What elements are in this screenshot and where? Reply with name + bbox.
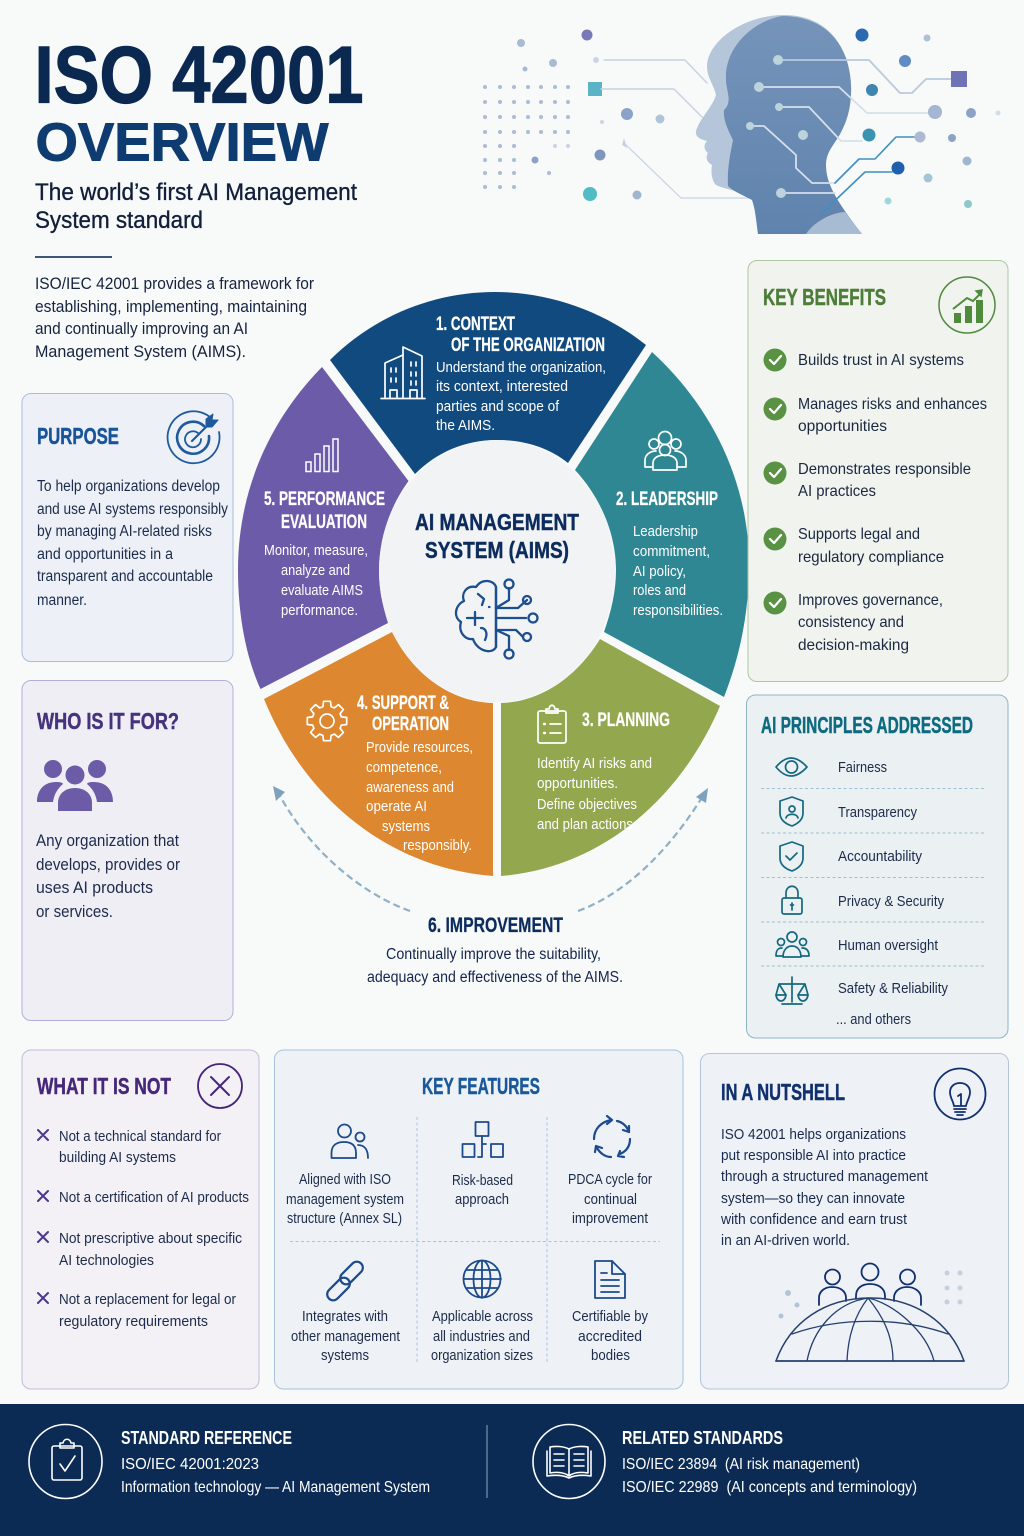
panel: what it is not xyxy=(22,1050,259,1389)
text: segment 4: awareness and xyxy=(366,779,454,796)
panel: purpose xyxy=(22,394,233,662)
text: feature risk-based: approach xyxy=(455,1192,509,1208)
text: related standards: ISO/IEC 23894 (AI risk management) xyxy=(622,1456,860,1473)
text: nutshell description: with confidence and earn trust xyxy=(720,1211,908,1228)
text: audience: Any organization that xyxy=(36,832,179,850)
text: feature risk-based xyxy=(452,1173,513,1208)
icon: people xyxy=(645,432,686,470)
text: segment 4: operate AI xyxy=(366,798,427,815)
text: segment 1: Understand the organization, xyxy=(436,359,606,376)
text: feature integrates: other management xyxy=(291,1329,400,1345)
icon: shield check xyxy=(780,842,803,871)
icon: eye xyxy=(776,758,807,776)
list: not items: building AI systems xyxy=(59,1150,176,1166)
intro text: establishing, implementing, maintaining xyxy=(35,298,307,316)
text: audience: uses AI products xyxy=(36,879,153,897)
icon: target xyxy=(168,411,220,463)
text: nutshell description xyxy=(720,1126,929,1249)
title: ISO 42001 xyxy=(34,30,364,120)
text: segment 5: analyze and xyxy=(281,562,350,579)
text: feature integrates: Integrates with xyxy=(302,1309,388,1325)
panel: AI principles xyxy=(746,695,1008,1038)
text: feature certifiable xyxy=(572,1309,649,1364)
text: segment 5: Monitor, measure, xyxy=(264,542,368,559)
list: benefits: Improves governance, xyxy=(798,592,943,609)
panel: who is it for xyxy=(22,680,233,1020)
list: principles: Privacy & Security xyxy=(838,894,945,910)
center: AI management system: AI MANAGEMENT xyxy=(415,509,580,535)
icon: cycle arrows xyxy=(594,1116,630,1157)
icon: padlock xyxy=(782,886,802,914)
illustration: AI head with circuits xyxy=(483,15,1000,234)
text: nutshell description: put responsible AI into practice xyxy=(721,1147,906,1164)
text: segment 5: EVALUATION xyxy=(281,512,367,533)
text: segment 3: Identify AI risks and xyxy=(537,755,652,772)
text: standard reference: Information technology — AI Management System xyxy=(121,1479,430,1496)
text: segment 3: opportunities. xyxy=(537,775,618,792)
text: segment 1: parties and scope of xyxy=(436,398,560,415)
text: related standards xyxy=(622,1428,917,1496)
text: improvement: adequacy and effectiveness of the AIMS. xyxy=(367,969,623,986)
text: feature PDCA xyxy=(568,1172,652,1227)
list: not items: regulatory requirements xyxy=(59,1314,208,1330)
icon: chain link xyxy=(325,1259,365,1303)
text: purpose description: transparent and accountable xyxy=(37,568,213,585)
text: segment 4: competence, xyxy=(366,759,442,776)
heading: in a nutshell: IN A NUTSHELL xyxy=(721,1079,845,1105)
panel: key benefits xyxy=(748,260,1008,682)
heading: who is it for: WHO IS IT FOR? xyxy=(37,708,179,734)
subtitle: The world’s first AI Management xyxy=(35,179,357,206)
text: purpose description: To help organizations develop xyxy=(37,478,220,495)
text: feature certifiable: Certifiable by xyxy=(572,1309,649,1325)
footer band xyxy=(0,1404,1024,1536)
title xyxy=(34,30,364,172)
segment 2: leadership xyxy=(575,352,749,697)
icon: bar chart xyxy=(306,439,338,472)
text: purpose description xyxy=(37,478,228,609)
text: segment 3: Define objectives xyxy=(537,796,637,813)
text: related standards: RELATED STANDARDS xyxy=(622,1428,783,1448)
text: audience: or services. xyxy=(36,903,113,921)
list: benefits: opportunities xyxy=(798,418,887,435)
icon: lightbulb xyxy=(934,1068,986,1120)
text: nutshell description: ISO 42001 helps organizations xyxy=(721,1126,906,1143)
text: segment 4: responsibly. xyxy=(403,837,472,854)
icon: brain circuit xyxy=(456,580,538,658)
segment 3: planning xyxy=(501,639,720,876)
list: benefits: Supports legal and xyxy=(798,526,920,543)
center: AI management system xyxy=(379,440,615,702)
list: benefits: decision-making xyxy=(798,637,909,654)
text: segment 5: evaluate AIMS xyxy=(281,582,363,599)
list: benefits: regulatory compliance xyxy=(798,549,944,566)
list: not items: Not a certification of AI products xyxy=(59,1190,249,1206)
text: feature applicable: Applicable across xyxy=(432,1309,533,1325)
text: segment 5 xyxy=(264,489,385,619)
text: segment 4: systems xyxy=(382,818,430,835)
text: segment 2 xyxy=(616,489,723,619)
list: principles xyxy=(836,760,949,1028)
text: feature aligned xyxy=(286,1172,404,1227)
text: segment 1: 1. CONTEXT xyxy=(436,314,515,335)
icon: hierarchy xyxy=(462,1122,503,1157)
list: principles: ... and others xyxy=(836,1012,911,1028)
text: feature certifiable: accredited xyxy=(578,1329,642,1345)
text: segment 1: the AIMS. xyxy=(436,417,495,434)
text: feature applicable: all industries and xyxy=(433,1329,530,1345)
text: segment 4: Provide resources, xyxy=(366,739,473,756)
text: standard reference: STANDARD REFERENCE xyxy=(121,1428,292,1448)
text: nutshell description: in an AI-driven world. xyxy=(721,1232,850,1249)
text: segment 2: commitment, xyxy=(633,543,710,560)
text: segment 3: 3. PLANNING xyxy=(582,710,670,731)
heading: key features: KEY FEATURES xyxy=(422,1073,540,1099)
text: segment 1: its context, interested xyxy=(436,378,568,395)
text: standard reference: ISO/IEC 42001:2023 xyxy=(121,1456,259,1473)
list: benefits: AI practices xyxy=(798,483,876,500)
list: not items: AI technologies xyxy=(59,1253,154,1269)
list: not items xyxy=(38,1129,249,1330)
text: feature PDCA: improvement xyxy=(572,1211,648,1227)
text: segment 1: OF THE ORGANIZATION xyxy=(451,335,605,356)
text: feature aligned: Aligned with ISO xyxy=(299,1172,391,1188)
text: nutshell description: through a structured management xyxy=(721,1168,929,1185)
text: standard reference xyxy=(121,1428,430,1496)
text: segment 1 xyxy=(436,314,606,434)
panel: key features xyxy=(274,1050,683,1389)
intro text: Management System (AIMS). xyxy=(35,343,246,361)
list: benefits: consistency and xyxy=(798,614,904,631)
icon: gear xyxy=(307,701,347,741)
icon: two people xyxy=(332,1124,368,1158)
title: OVERVIEW xyxy=(36,114,329,172)
icon: people xyxy=(37,760,113,811)
text: feature aligned: management system xyxy=(286,1192,404,1208)
intro text: and continually improving an AI xyxy=(35,320,248,338)
heading: key benefits: KEY BENEFITS xyxy=(763,284,886,310)
text: feature PDCA: continual xyxy=(584,1192,637,1208)
chart: AIMS wheel xyxy=(238,292,749,876)
list: principles: Transparency xyxy=(838,805,918,821)
text: segment 5: performance. xyxy=(281,602,358,619)
subtitle xyxy=(35,179,357,234)
list: principles: Fairness xyxy=(838,760,887,776)
arrow: improvement right xyxy=(578,788,708,911)
icon: growth chart xyxy=(939,277,995,333)
text: segment 4: OPERATION xyxy=(372,714,449,735)
intro text: ISO/IEC 42001 provides a framework for xyxy=(35,275,314,293)
text: purpose description: by managing AI-related risks xyxy=(37,523,212,540)
text: nutshell description: system—so they can innovate xyxy=(721,1190,905,1207)
icon: clipboard xyxy=(538,705,566,743)
text: purpose description: and use AI systems responsibly xyxy=(37,501,228,518)
list: principles: Accountability xyxy=(838,849,923,865)
intro text xyxy=(35,275,314,361)
list: not items: Not a replacement for legal or xyxy=(59,1292,236,1308)
icon: open book xyxy=(533,1424,605,1498)
list: benefits xyxy=(764,348,987,654)
text: feature certifiable: bodies xyxy=(591,1348,630,1364)
heading: purpose: PURPOSE xyxy=(37,423,119,449)
text: segment 4: 4. SUPPORT & xyxy=(357,693,449,714)
text: feature PDCA: PDCA cycle for xyxy=(568,1172,652,1188)
text: improvement: Continually improve the suitability, xyxy=(386,946,601,963)
text: purpose description: manner. xyxy=(37,592,87,609)
text: segment 4 xyxy=(357,693,473,854)
text: feature integrates: systems xyxy=(321,1348,369,1364)
text: segment 5: 5. PERFORMANCE xyxy=(264,489,385,510)
heading: what it is not: WHAT IT IS NOT xyxy=(37,1073,171,1099)
text: segment 3: and plan actions xyxy=(537,816,633,833)
text: improvement xyxy=(367,914,623,986)
panel: in a nutshell xyxy=(700,1054,1008,1389)
icon: clipboard check xyxy=(29,1424,102,1498)
list: principles: Safety & Reliability xyxy=(838,981,949,997)
list: benefits: Builds trust in AI systems xyxy=(798,352,964,369)
text: audience xyxy=(36,832,180,921)
icon: document xyxy=(595,1261,625,1298)
list: principles: Human oversight xyxy=(838,938,938,954)
segment 5: performance evaluation xyxy=(238,367,408,689)
list: benefits: Manages risks and enhances xyxy=(798,396,987,413)
text: feature applicable xyxy=(431,1309,533,1364)
icon: shield person xyxy=(780,797,803,826)
segment 4: support and operation xyxy=(264,632,493,876)
illustration: people on globe xyxy=(776,1264,964,1361)
list: not items: Not prescriptive about specific xyxy=(59,1231,242,1247)
segment 1: context of the organization xyxy=(330,292,646,474)
text: segment 2: roles and xyxy=(633,582,686,599)
center: AI management system: SYSTEM (AIMS) xyxy=(425,537,569,563)
list: not items: Not a technical standard for xyxy=(59,1129,221,1145)
text: segment 2: responsibilities. xyxy=(633,602,723,619)
list: benefits: Demonstrates responsible xyxy=(798,461,971,478)
text: related standards: ISO/IEC 22989 (AI concepts and terminology) xyxy=(622,1479,917,1496)
arrow: improvement left xyxy=(273,786,410,911)
text: feature integrates xyxy=(291,1309,400,1364)
icon: scales xyxy=(776,977,808,1004)
text: feature risk-based: Risk-based xyxy=(452,1173,513,1189)
subtitle: System standard xyxy=(35,207,203,234)
text: segment 2: AI policy, xyxy=(633,563,686,580)
icon: building xyxy=(381,347,425,398)
icon: people xyxy=(776,932,809,957)
text: purpose description: and opportunities in a xyxy=(37,546,173,563)
text: audience: develops, provides or xyxy=(36,856,180,874)
icon: globe xyxy=(464,1260,501,1298)
text: segment 2: Leadership xyxy=(633,523,698,540)
text: feature aligned: structure (Annex SL) xyxy=(287,1211,402,1227)
text: segment 2: 2. LEADERSHIP xyxy=(616,489,718,510)
text: improvement: 6. IMPROVEMENT xyxy=(428,914,563,937)
text: segment 3 xyxy=(537,710,670,833)
text: feature applicable: organization sizes xyxy=(431,1348,533,1364)
icon: cross circle xyxy=(198,1064,242,1108)
